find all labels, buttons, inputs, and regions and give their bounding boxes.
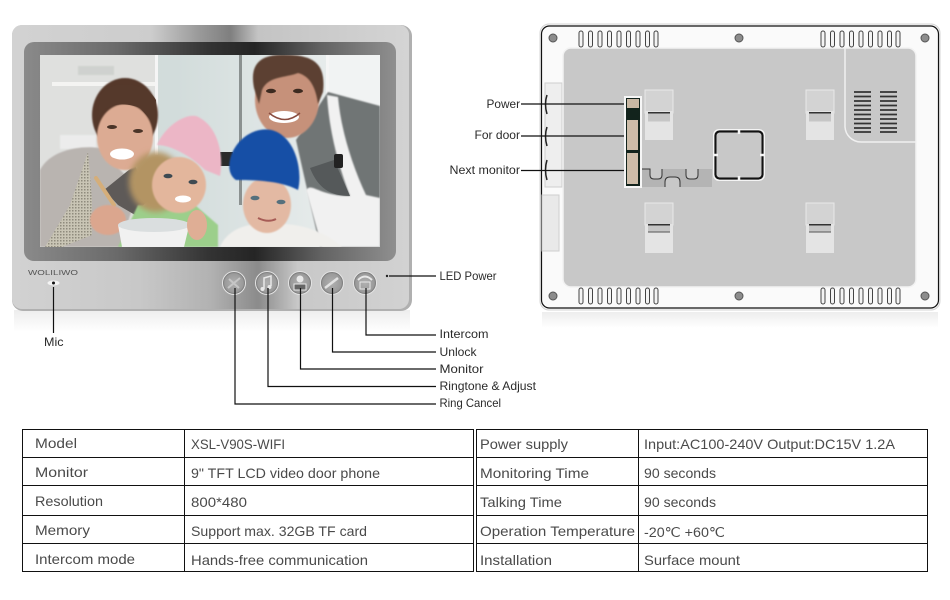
square knockout [713, 129, 765, 181]
row: Talking Time: 90 seconds [644, 494, 716, 510]
button: monitor [288, 272, 312, 294]
battery hatch outline [845, 48, 916, 142]
side tabs [542, 83, 562, 251]
LED indicator [386, 275, 388, 277]
label: Ring Cancel: Ring Cancel [440, 396, 501, 410]
row: Model [35, 435, 285, 452]
row: Power supply: Input:AC100-240V Output:DC15V 1.2A [644, 436, 896, 452]
reflection: back [542, 312, 938, 328]
row: Resolution [35, 493, 247, 510]
vents: speaker [854, 92, 897, 132]
label: Ringtone & Adjust: Ringtone & Adjust [440, 379, 537, 393]
row: Installation: Installation [480, 552, 552, 568]
microphone [48, 280, 60, 286]
row: Talking Time: Talking Time [480, 494, 562, 510]
label: Power: Power [486, 97, 520, 111]
table: left specifications [22, 430, 474, 572]
row: Memory: Support max. 32GB TF card [191, 523, 367, 539]
row: Model: XSL-V90S-WIFI [191, 436, 285, 452]
row: Monitoring Time [480, 465, 716, 481]
button: ring cancel [222, 272, 246, 294]
screws [549, 34, 929, 300]
row: Operation Temperature: -20℃ +60℃ [644, 524, 725, 540]
reflection: front [14, 310, 410, 332]
wire channel [642, 169, 712, 187]
row: Resolution: 800*480 [191, 494, 247, 510]
row: Installation [480, 552, 740, 568]
label: Next monitor: Next monitor [450, 163, 520, 177]
row: Monitor: 9" TFT LCD video door phone [191, 465, 380, 481]
mounting brackets [645, 90, 834, 253]
panel: monitor front [12, 25, 412, 332]
label: Mic: Mic [44, 335, 64, 349]
row: Memory: Memory [35, 522, 90, 538]
row: Intercom mode [35, 551, 368, 568]
row: Power supply [480, 436, 896, 452]
label: Intercom: Intercom [440, 327, 488, 341]
man [253, 55, 380, 247]
row: Monitoring Time: Monitoring Time [480, 465, 589, 481]
label: Unlock: Unlock [440, 345, 478, 359]
row: Monitoring Time: 90 seconds [644, 465, 716, 481]
brand logo: WOLILIWO [28, 270, 79, 277]
girl with pink hat [118, 116, 221, 247]
panel: monitor back [540, 24, 940, 328]
label: Monitor: Monitor [440, 362, 484, 376]
back casing [540, 24, 940, 310]
table: right specifications [476, 430, 928, 572]
row: Operation Temperature [480, 523, 725, 540]
button: unlock [320, 272, 344, 294]
row: Intercom mode: Hands-free communication [191, 552, 368, 568]
screen bezel [24, 42, 396, 261]
row: Intercom mode: Intercom mode [35, 551, 135, 567]
row: Model: Model [35, 435, 77, 451]
row: Installation: Surface mount [644, 552, 740, 568]
label: LED Power: LED Power [440, 269, 496, 283]
row: Monitor: Monitor [35, 464, 88, 480]
button: ringtone [256, 272, 278, 294]
woman [40, 78, 158, 247]
photo: family on screen [40, 55, 380, 247]
row: Operation Temperature: Operation Temperature [480, 523, 635, 539]
row: Talking Time [480, 494, 716, 510]
label: For door: For door [474, 128, 520, 142]
row: Memory [35, 522, 367, 539]
row: Resolution: Resolution [35, 493, 103, 509]
row: Monitor [35, 464, 380, 481]
monitor casing [12, 25, 412, 311]
connector strip [624, 96, 642, 188]
boy with blue hat [220, 129, 342, 247]
callout lines: front [54, 276, 436, 404]
button: intercom [354, 272, 376, 294]
row: Power supply: Power supply [480, 436, 568, 452]
back plate [563, 48, 916, 287]
slots: top and bottom [579, 31, 900, 304]
callout lines: back [521, 104, 624, 170]
